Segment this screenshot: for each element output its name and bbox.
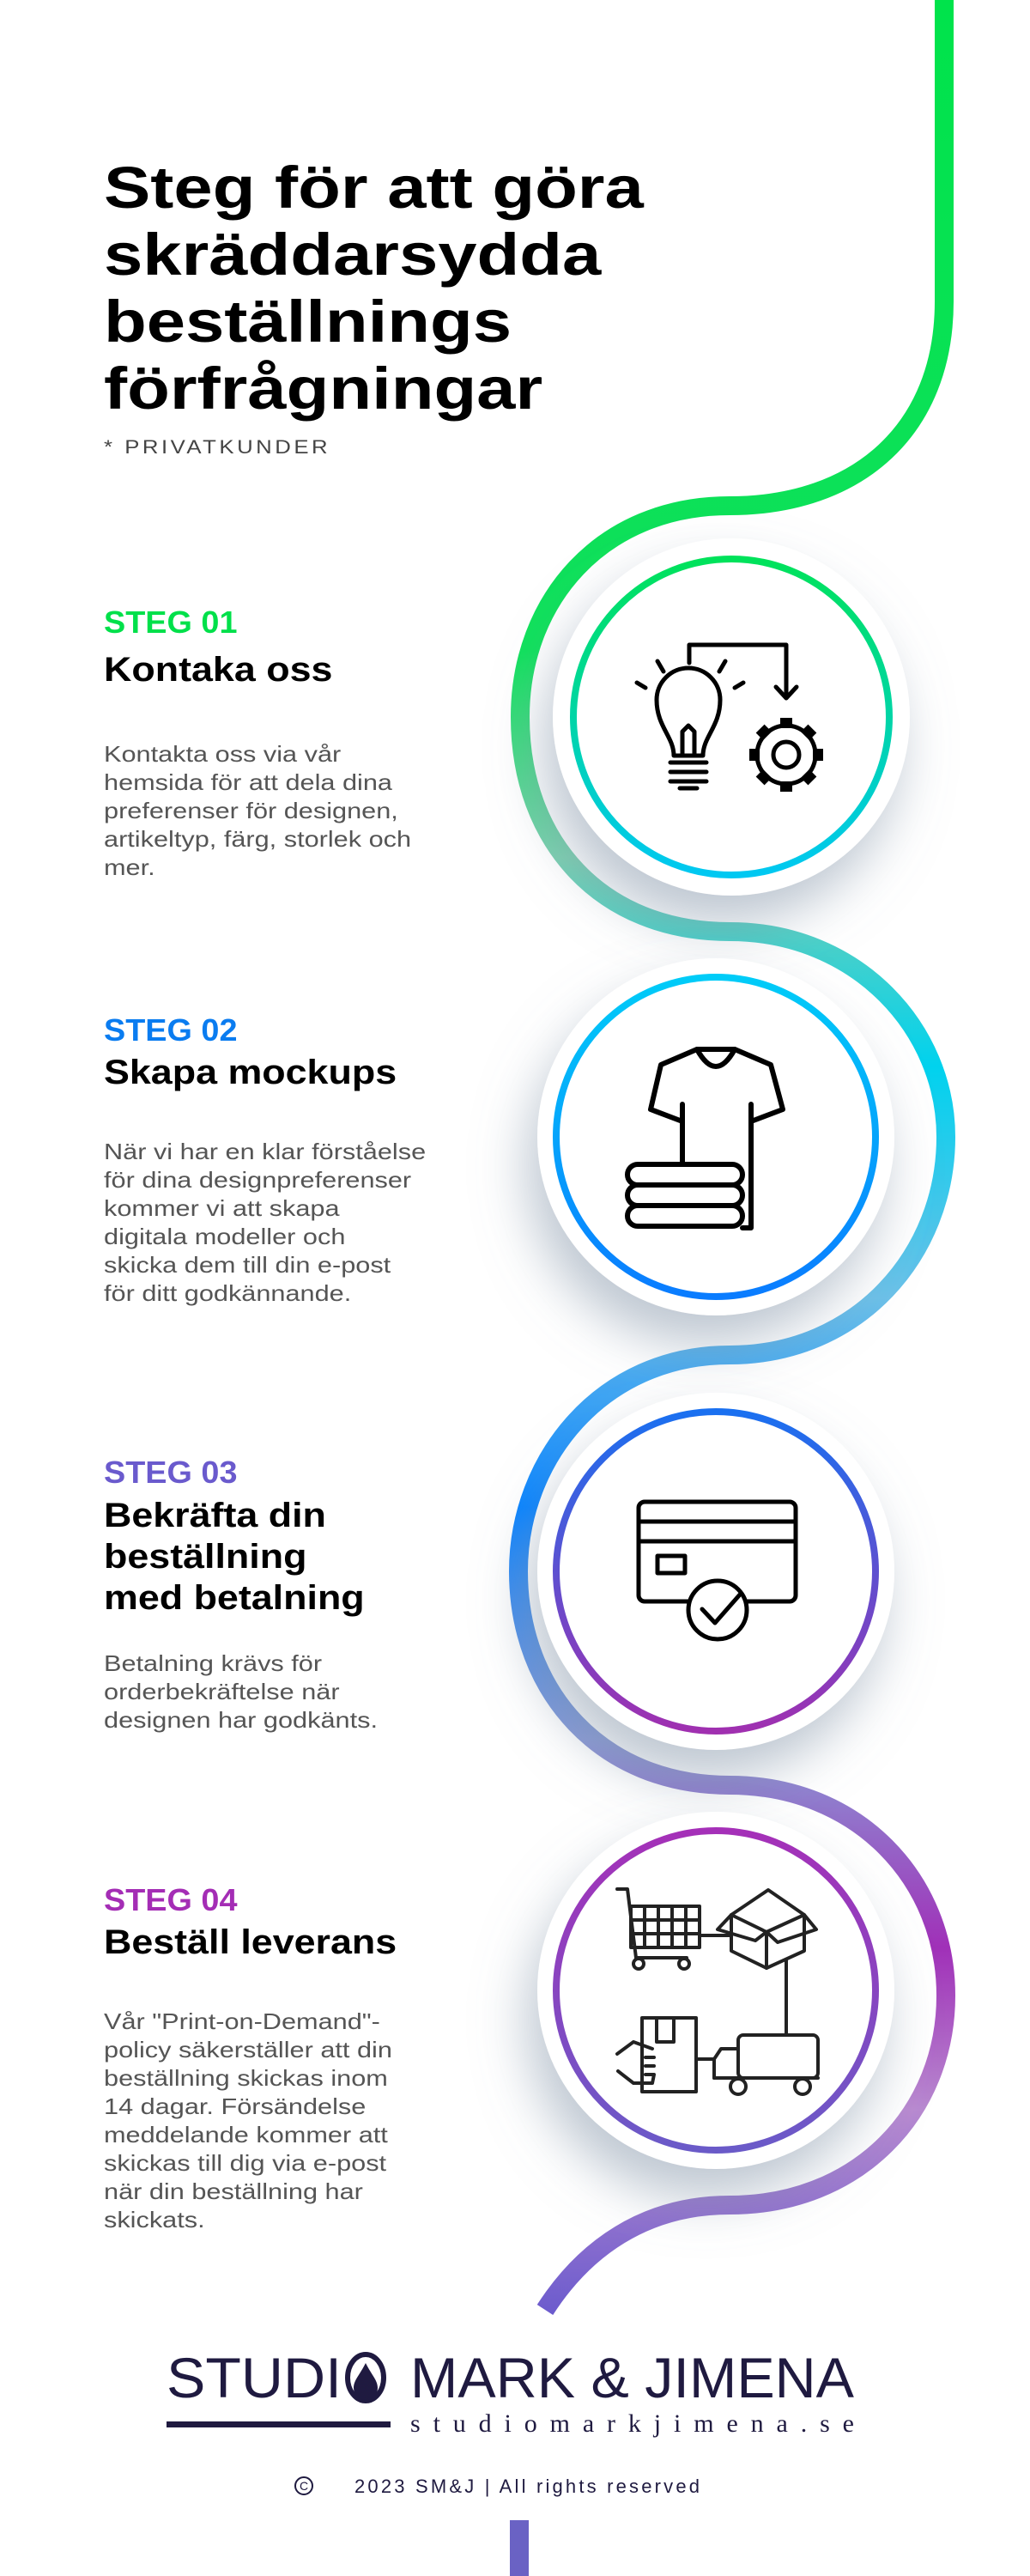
- step 1 text: [104, 605, 411, 880]
- step 4 body: 14 dagar. Försändelse: [104, 2093, 366, 2119]
- step 4 body: meddelande kommer att: [104, 2122, 388, 2148]
- title: beställnings: [104, 289, 512, 355]
- logo: [167, 2346, 854, 2438]
- step 1 body: hemsida för att dela dina: [104, 769, 392, 795]
- copyright line: C: [300, 2479, 308, 2493]
- step 1 label: STEG 01: [104, 605, 237, 640]
- logo: MARK & JIMENA: [410, 2346, 854, 2409]
- title: skräddarsydda: [104, 222, 601, 288]
- subtitle: * PRIVATKUNDER: [104, 436, 330, 458]
- step 2 text: [104, 1012, 426, 1306]
- step 3 body: [104, 1650, 378, 1733]
- title: [104, 155, 644, 422]
- step 2 heading: Skapa mockups: [104, 1054, 397, 1091]
- logo: studiomarkjimena.se: [410, 2409, 854, 2438]
- step 3 text: [104, 1455, 378, 1733]
- step 4 body: [104, 2008, 392, 2233]
- step 1 body: Kontakta oss via vår: [104, 741, 341, 767]
- step 2 body: skicka dem till din e-post: [104, 1252, 391, 1278]
- step 1 body: preferenser för designen,: [104, 798, 398, 823]
- step 4 body: skickats.: [104, 2207, 205, 2233]
- step 1 body: artikeltyp, färg, storlek och: [104, 826, 411, 852]
- step 1 body: mer.: [104, 854, 155, 880]
- step 3 heading: beställning: [104, 1538, 306, 1576]
- step 4 body: när din beställning har: [104, 2178, 363, 2204]
- step 2 body: digitala modeller och: [104, 1224, 345, 1249]
- icon: lightbulb and gear: [637, 645, 823, 792]
- circle: step 4: [537, 1812, 894, 2169]
- title: Steg för att göra: [104, 155, 644, 221]
- step 4 heading: Beställ leverans: [104, 1923, 397, 1961]
- step 1 body: [104, 741, 411, 880]
- step 2 body: [104, 1139, 426, 1306]
- step 3 heading: [104, 1497, 365, 1617]
- step 4 body: policy säkerställer att din: [104, 2037, 392, 2063]
- step 3 label: STEG 03: [104, 1455, 237, 1490]
- circle: step 3: [537, 1393, 894, 1750]
- step 3 body: orderbekräftelse när: [104, 1679, 340, 1704]
- step 2 body: för ditt godkännande.: [104, 1280, 351, 1306]
- circle: step 1: [553, 538, 910, 896]
- step 2 body: kommer vi att skapa: [104, 1195, 340, 1221]
- icon: cart, box, hand, truck: [617, 1889, 818, 2094]
- icon: t-shirt with folded clothes: [627, 1049, 783, 1228]
- logo: STUDI: [167, 2346, 342, 2409]
- copyright line: 2023 SM&J | All rights reserved: [354, 2476, 700, 2497]
- step 2 body: När vi har en klar förståelse: [104, 1139, 426, 1164]
- step 3 heading: Bekräfta din: [104, 1497, 326, 1534]
- step 4 label: STEG 04: [104, 1882, 237, 1917]
- step 3 heading: med betalning: [104, 1579, 365, 1617]
- bottom bar: [510, 2520, 529, 2576]
- title: förfrågningar: [104, 355, 542, 422]
- icon: credit card with check: [639, 1502, 796, 1639]
- step 3 body: designen har godkänts.: [104, 1707, 378, 1733]
- circle: step 2: [537, 958, 894, 1315]
- step 2 body: för dina designpreferenser: [104, 1167, 411, 1193]
- step 4 body: skickas till dig via e-post: [104, 2150, 386, 2176]
- step 1 heading: Kontaka oss: [104, 651, 332, 689]
- step 4 text: [104, 1882, 397, 2233]
- step 4 body: Vår "Print-on-Demand"-: [104, 2008, 380, 2034]
- curved gradient path: [518, 0, 946, 2310]
- step 4 body: beställning skickas inom: [104, 2065, 388, 2091]
- step 2 label: STEG 02: [104, 1012, 237, 1048]
- step 3 body: Betalning krävs för: [104, 1650, 322, 1676]
